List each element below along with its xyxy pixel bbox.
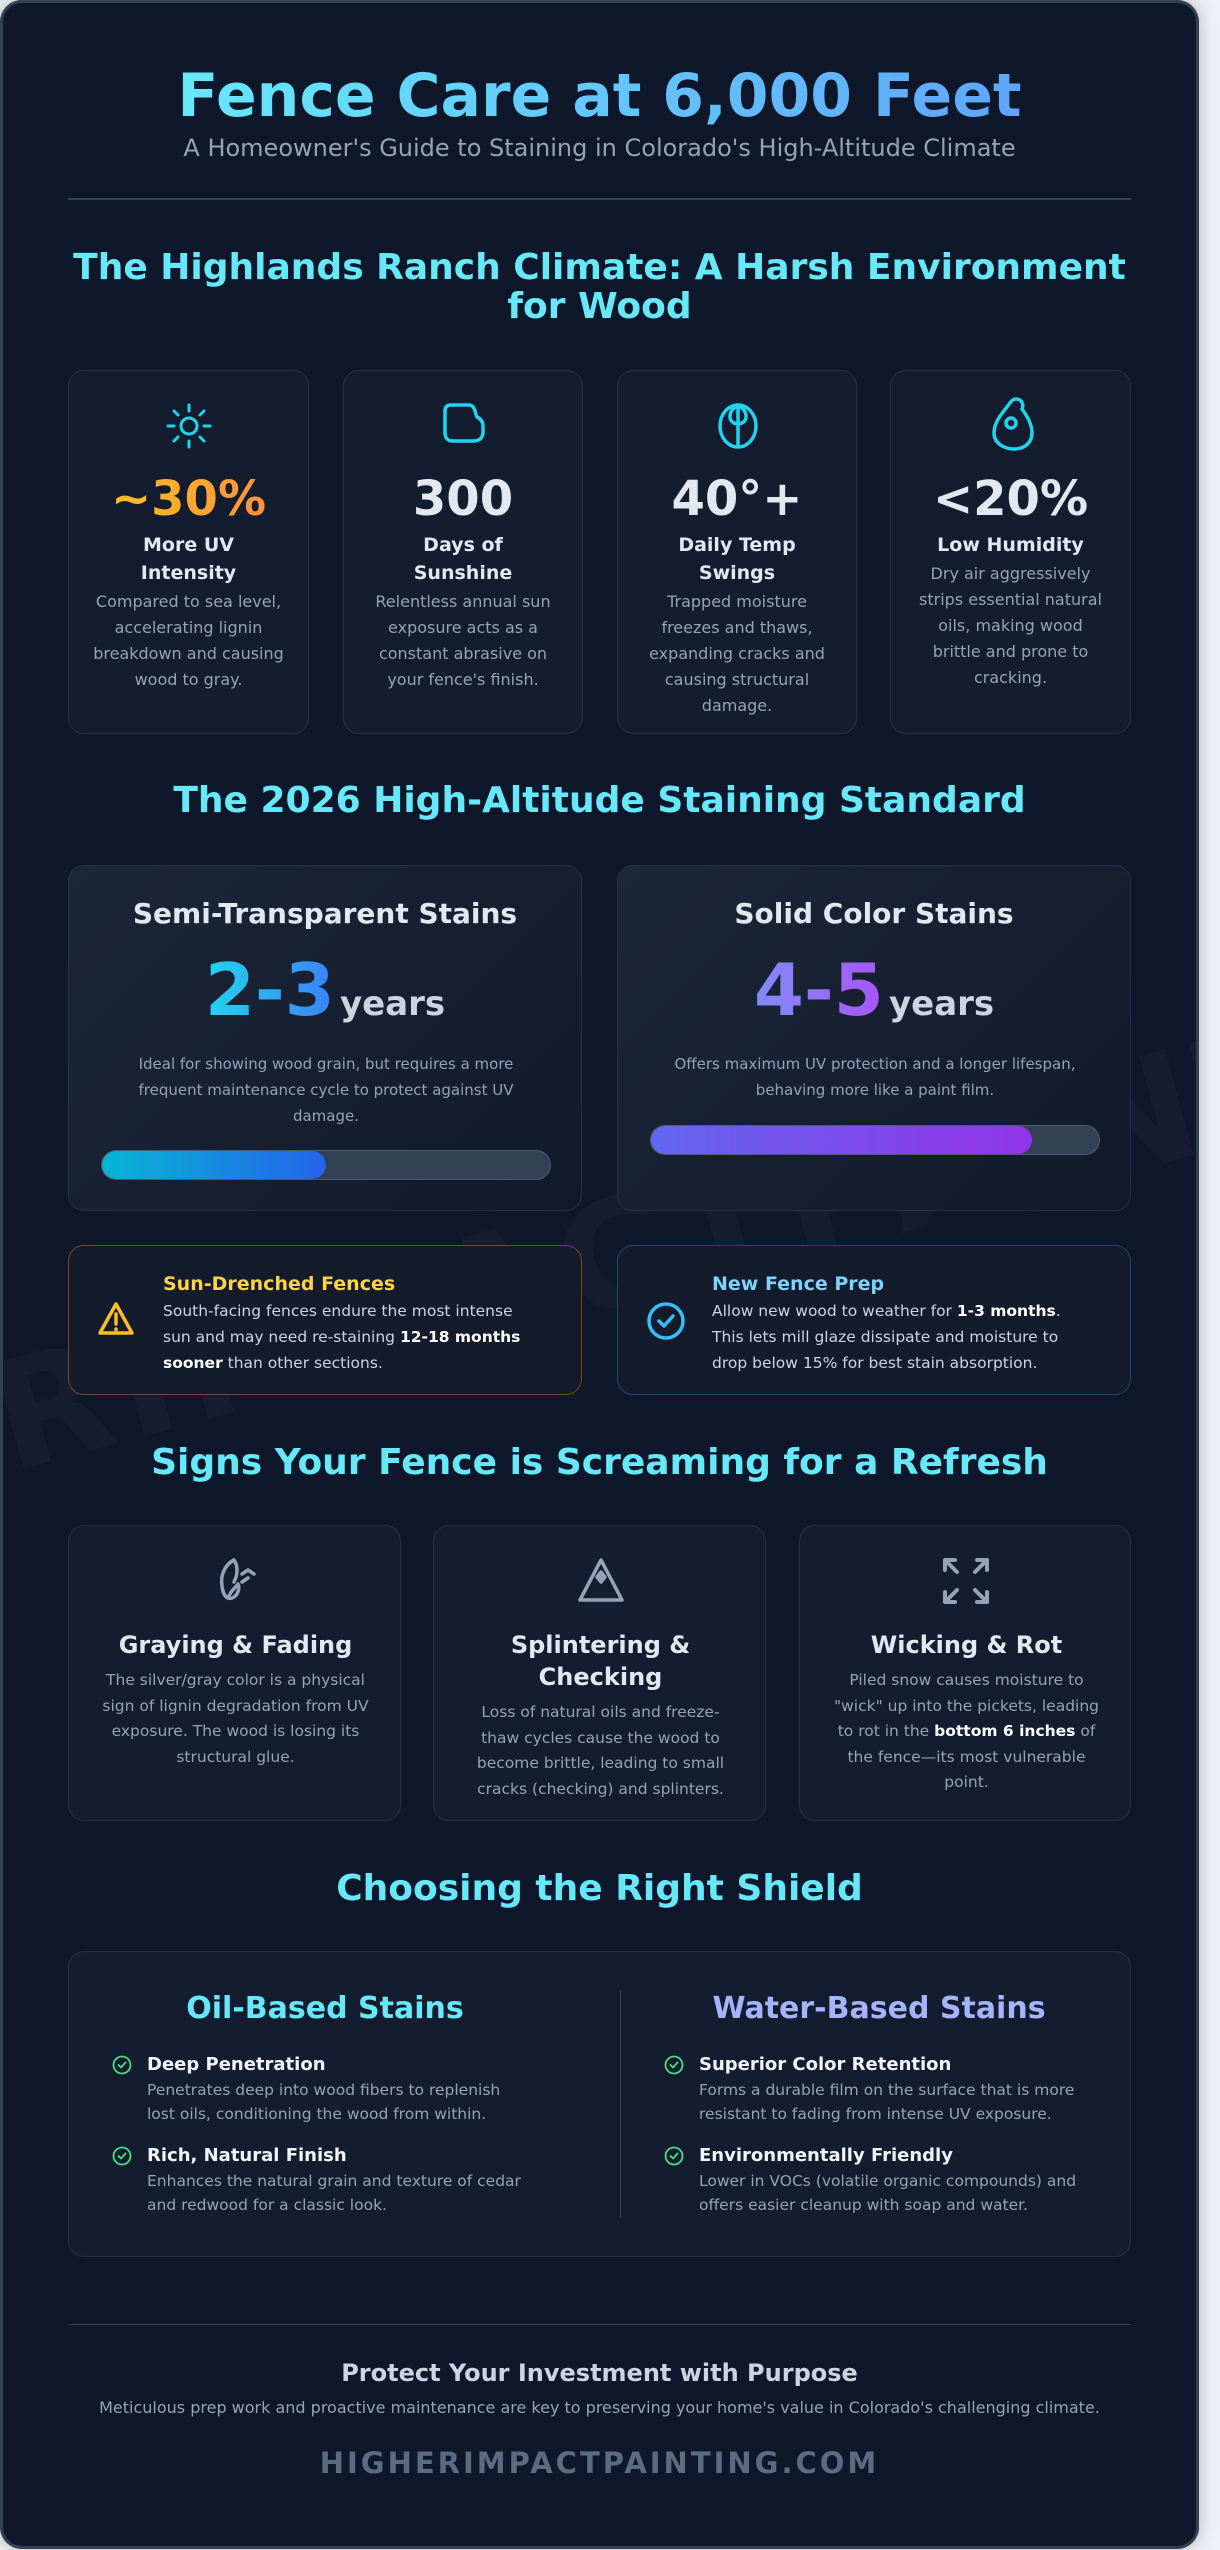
heading: water-based: Water-Based Stains — [712, 1991, 1046, 2026]
footer brand: HIGHERIMPACTPAINTING.COM — [320, 2446, 879, 2480]
sign card: wicking: Wicking & Rot — [871, 1631, 1062, 1659]
heading: shield: Choosing the Right Shield — [336, 1868, 863, 1909]
stat card: sunshine: 300 — [413, 471, 513, 527]
text: Ideal for showing wood grain, but requires a more frequent maintenance cycle to protect against UV damage. — [138, 1055, 514, 1125]
icon: droplet — [992, 397, 1034, 451]
sign card: splintering: Loss of natural oils and freeze-thaw cycles cause the wood to become brittle, leading to small cracks (checking) and splinters. — [477, 1703, 724, 1798]
progress bar — [650, 1125, 1100, 1155]
item: color retention: Forms a durable film on the surface that is more resistant to fading from intense UV exposure. — [699, 2081, 1074, 2123]
stat card: UV — [68, 370, 309, 734]
title: Fence Care at 6,000 Feet — [177, 61, 1022, 131]
callout: new fence prep — [617, 1245, 1131, 1395]
text: Sun-Drenched Fences — [163, 1273, 395, 1295]
item: eco friendly: Lower in VOCs (volatile organic compounds) and offers easier cleanup with soap and water. — [699, 2172, 1076, 2214]
sign card: splintering — [433, 1525, 766, 1821]
heading: standard: The 2026 High-Altitude Staining Standard — [173, 780, 1026, 821]
item: natural finish — [112, 2145, 521, 2214]
stat card: temp — [617, 370, 857, 734]
sign card: splintering: Splintering & Checking — [511, 1631, 690, 1691]
heading: climate: for Wood — [507, 286, 692, 327]
text: Offers maximum UV protection and a longer lifespan, behaving more like a paint film. — [674, 1055, 1076, 1099]
item: eco friendly — [664, 2145, 1076, 2214]
item: color retention — [664, 2054, 1074, 2123]
stat card: humidity: Low Humidity — [937, 534, 1084, 556]
item: deep penetration: Penetrates deep into wood fibers to replenish lost oils, conditioning the wood from within. — [147, 2081, 500, 2123]
item: deep penetration: Deep Penetration — [147, 2054, 326, 2075]
heading: Solid Color Stains — [734, 897, 1014, 930]
heading: signs: Signs Your Fence is Screaming for a Refresh — [151, 1442, 1048, 1483]
stat card: humidity — [890, 370, 1131, 734]
icon: thermometer — [718, 403, 758, 449]
stat card: sunshine: Days of Sunshine — [414, 534, 512, 584]
text: South-facing fences endure the most intense sun and may need re-staining 12-18 months sooner than other sections. — [163, 1302, 520, 1372]
stat card: UV: Compared to sea level, accelerating lignin breakdown and causing wood to gray. — [93, 592, 284, 689]
number: 4-5 years — [754, 948, 994, 1032]
icon: triangle — [578, 1558, 624, 1602]
icon: sun shape — [443, 403, 485, 443]
heading: oil-based: Oil-Based Stains — [186, 1991, 464, 2026]
item: color retention: Superior Color Retention — [699, 2054, 951, 2075]
stat card: sunshine: Relentless annual sun exposure acts as a constant abrasive on your fence's finish. — [375, 592, 551, 689]
item: deep penetration — [112, 2054, 500, 2123]
progress bar — [101, 1150, 551, 1180]
stain card: semi-transparent — [68, 865, 582, 1211]
sign card: graying: The silver/gray color is a physical sign of lignin degradation from UV exposure. The wood is losing its structural glue. — [102, 1671, 369, 1766]
stat card: temp: 40°+ — [671, 471, 802, 527]
sign card: wicking: Piled snow causes moisture to "wick" up into the pickets, leading to rot in the bottom 6 inches of the fence—its most vulnerable point. — [834, 1671, 1099, 1791]
text: New Fence Prep — [712, 1273, 884, 1295]
icon: sun — [166, 404, 212, 448]
text: Allow new wood to weather for 1-3 months. This lets mill glaze dissipate and moisture to drop below 15% for best stain absorption. — [712, 1302, 1061, 1372]
stat card: sunshine — [343, 370, 583, 734]
callout: sun-drenched — [68, 1245, 582, 1395]
stat card: temp: Daily Temp Swings — [678, 534, 796, 584]
stat card: humidity: <20% — [933, 471, 1088, 527]
stat card: UV: ~30% — [111, 471, 266, 527]
heading: Semi-Transparent Stains — [133, 897, 517, 930]
sign card: graying: Graying & Fading — [119, 1631, 352, 1659]
item: natural finish: Rich, Natural Finish — [147, 2145, 347, 2166]
icon: feather — [220, 1558, 256, 1600]
icon: check circle — [647, 1302, 685, 1340]
icon: expand arrows — [942, 1558, 990, 1604]
item: natural finish: Enhances the natural grain and texture of cedar and redwood for a classic look. — [147, 2172, 521, 2214]
icon: warning — [98, 1302, 134, 1335]
stat card: humidity: Dry air aggressively strips essential natural oils, making wood brittle and prone to cracking. — [919, 564, 1102, 687]
stain card: solid — [617, 865, 1131, 1211]
heading: climate — [73, 247, 1126, 327]
item: eco friendly: Environmentally Friendly — [699, 2145, 953, 2166]
panel: stain types — [68, 1951, 1131, 2257]
subtitle: A Homeowner's Guide to Staining in Colorado's High-Altitude Climate — [183, 134, 1016, 162]
sign card: wicking — [799, 1525, 1131, 1821]
stat card: UV: More UV Intensity — [141, 534, 236, 584]
number: 2-3 years — [205, 948, 445, 1032]
stat card: temp: Trapped moisture freezes and thaws, expanding cracks and causing structural damage. — [649, 592, 825, 715]
sign card: graying — [68, 1525, 401, 1821]
heading: climate: The Highlands Ranch Climate: A Harsh Environment — [73, 247, 1126, 288]
footer text: Meticulous prep work and proactive maintenance are key to preserving your home's value in Colorado's challenging climate. — [99, 2398, 1100, 2417]
footer heading: Protect Your Investment with Purpose — [341, 2359, 858, 2387]
